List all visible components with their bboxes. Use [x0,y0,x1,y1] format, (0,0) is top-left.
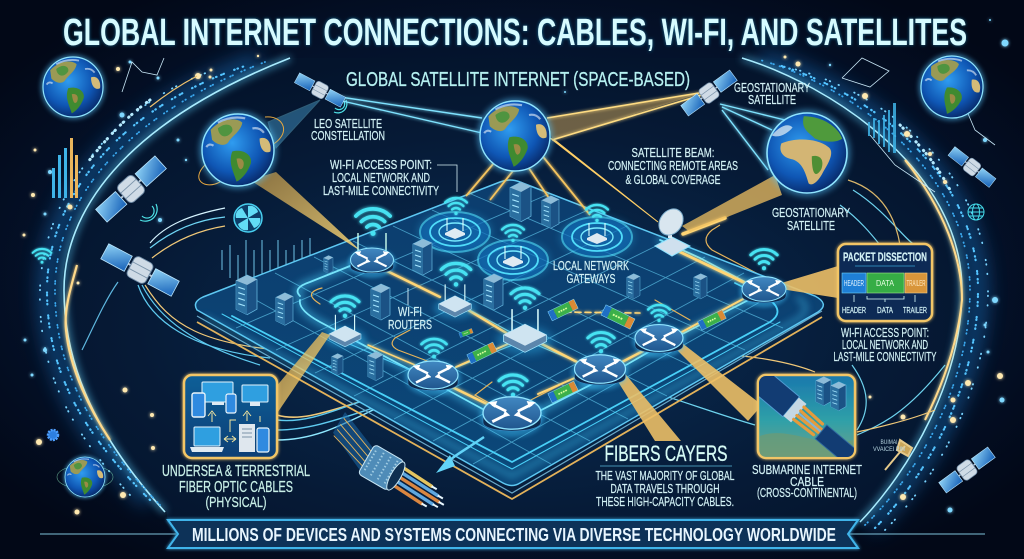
servers [236,182,707,381]
data segment: DATA [876,278,894,288]
leader arrow [407,288,409,305]
fibers description: THE VAST MAJORITY OF GLOBAL [596,468,734,483]
label: LEO constellation: CONSTELLATION [311,128,385,143]
fiber curves [82,180,945,440]
globe icon [968,204,984,220]
left bar chart [52,138,78,198]
tiny label [873,440,905,453]
label: geostationary top: SATELLITE [748,92,796,107]
antennas on hub A [358,233,386,255]
corner earth left [41,55,105,119]
gold beam: hub to packet box [768,266,838,298]
monitor [202,382,233,405]
label: satellite beam: & GLOBAL COVERAGE [626,172,721,187]
gold beam: hub to fibers label [612,370,681,441]
callout: packet dissection [838,244,932,321]
label: undersea cables: (PHYSICAL) [206,494,267,511]
tiny label: VVAICEI PIN [873,447,905,453]
segment labels [842,305,927,315]
blue beams: geostationary [720,104,785,170]
segment labels: DATA [877,305,893,315]
rails [205,240,806,476]
grid [236,194,783,464]
key icon [885,440,912,470]
blue fog outside the dome [48,60,978,525]
orbit rings [199,117,284,185]
wifi signals [331,198,777,397]
fan icon [234,204,262,232]
tiny label: BUIMAI [880,440,898,446]
satellite dish [654,204,690,256]
label: geostationary lower [772,205,850,233]
label: geostationary top: GEOSTATIONARY [734,80,810,95]
network dome panel [62,58,962,522]
label: submarine cable: CABLE [790,474,824,489]
earth: Americas [199,111,277,189]
small routers [324,284,553,354]
laptop [190,427,224,452]
label: geostationary lower: GEOSTATIONARY [772,205,850,220]
tower [239,424,255,452]
phone right [257,428,269,452]
monitor right [242,385,268,406]
label: undersea cables [162,463,310,511]
beam: earth to geostationary satellite [547,92,705,140]
label: Wi-Fi access point top: LOCAL NETWORK AND [332,170,430,185]
label: undersea cables: FIBER OPTIC CABLES [179,479,293,496]
satellite beams [199,92,785,252]
header segment: HEADER [844,279,864,288]
label: LEO constellation: LEO SATELLITE [314,116,382,131]
blue arrow to cable [436,437,484,473]
earth: center [477,98,553,174]
label: Wi-Fi access point right: WI-FI ACCESS POINT: [841,325,929,340]
label: geostationary top [734,80,810,107]
phone [226,394,236,413]
segment labels: HEADER [842,305,866,315]
label: undersea cables: UNDERSEA & TERRESTRIAL [162,463,310,480]
label: gateways: LOCAL NETWORK [553,258,629,273]
tablet [192,393,205,417]
ring router 3 [560,216,634,258]
leader line [437,165,457,192]
label: Wi-Fi access point top: LAST-MILE CONNECTIVITY [323,183,439,198]
beam: earth to dish gold wide [682,175,782,232]
corner earth right [914,49,990,125]
satellite: LEO [294,71,346,109]
particle bands along the dome [40,60,988,530]
gold beam: hub to submarine cable [672,343,762,421]
label: Wi-Fi access point right: LAST-MILE CONNECTIVITY [834,349,937,364]
gold data rails [368,218,745,404]
label: satellite beam: CONNECTING REMOTE AREAS [608,158,738,173]
trailer segment: TRAILER [906,279,926,288]
satellite: geostationary [679,68,739,118]
banner text: MILLIONS OF DEVICES AND SYSTEMS CONNECTING VIA DIVERSE TECHNOLOGY WORLDWIDE [192,525,836,545]
blue beams: LEO satellite [268,100,320,148]
callout: submarine cable [754,371,859,462]
earth: Africa [764,110,850,196]
satellite signal arcs [140,100,347,221]
ring router 1 [418,211,492,253]
label: submarine cable [752,462,862,500]
label: satellite beam [608,145,738,187]
label: geostationary lower: SATELLITE [787,218,835,233]
fibers description: THESE HIGH-CAPACITY CABLES. [596,494,734,509]
cable cross-section [759,376,854,457]
label: satellite beam: SATELLITE BEAM: [632,145,714,160]
wifi outside dome [33,249,51,264]
label: Wi-Fi routers: WI-FI [398,304,422,319]
mini servers [816,377,846,411]
arrows [208,411,260,442]
data packets on rails [459,299,726,403]
beam: earth to dish [550,138,658,222]
gold beam: router to devices [275,332,330,412]
label: fibers layers: FIBERS CAYERS [604,441,728,466]
small earth lower left [57,455,113,499]
local network gateways [418,211,634,281]
callout: devices [184,375,277,458]
packet title: PACKET DISSECTION [843,250,927,264]
label: Wi-Fi routers [388,304,432,332]
label: submarine cable: SUBMARINE INTERNET [752,462,862,477]
right bar chart [868,103,896,153]
label: gateways [553,258,629,286]
satellite: left large [94,154,168,224]
divider under fibers heading [600,465,732,467]
satellite: bottom right [937,445,997,495]
label: LEO constellation [311,116,385,143]
heading: space-based: GLOBAL SATELLITE INTERNET (SPACE-BASED) [346,69,690,91]
label: Wi-Fi access point right [834,325,937,364]
label: gateways: GATEWAYS [566,271,616,286]
segment arrows [854,295,915,302]
bottom fiber cable [322,412,459,519]
network hubs [348,233,789,437]
fibers description: DATA TRAVELS THROUGH [610,481,720,496]
label: Wi-Fi routers: ROUTERS [388,317,432,332]
segment labels: TRAILER [903,305,927,315]
small signal bars under fan [222,238,310,282]
label: Wi-Fi access point right: LOCAL NETWORK AND [842,337,928,352]
label: Wi-Fi access point top [323,157,439,198]
satellite: right [947,145,997,189]
platform [195,180,823,499]
fibers description [596,468,734,509]
bottom banner [40,520,985,548]
beams down to gateways [466,148,590,215]
label: Wi-Fi access point top: WI-FI ACCESS POINT: [330,157,432,172]
gear icon [48,430,58,440]
ring router 2 [476,239,550,281]
beam: earth to router [250,172,362,252]
satellite: left lower [99,241,181,299]
label: submarine cable: (CROSS-CONTINENTAL) [757,485,857,500]
